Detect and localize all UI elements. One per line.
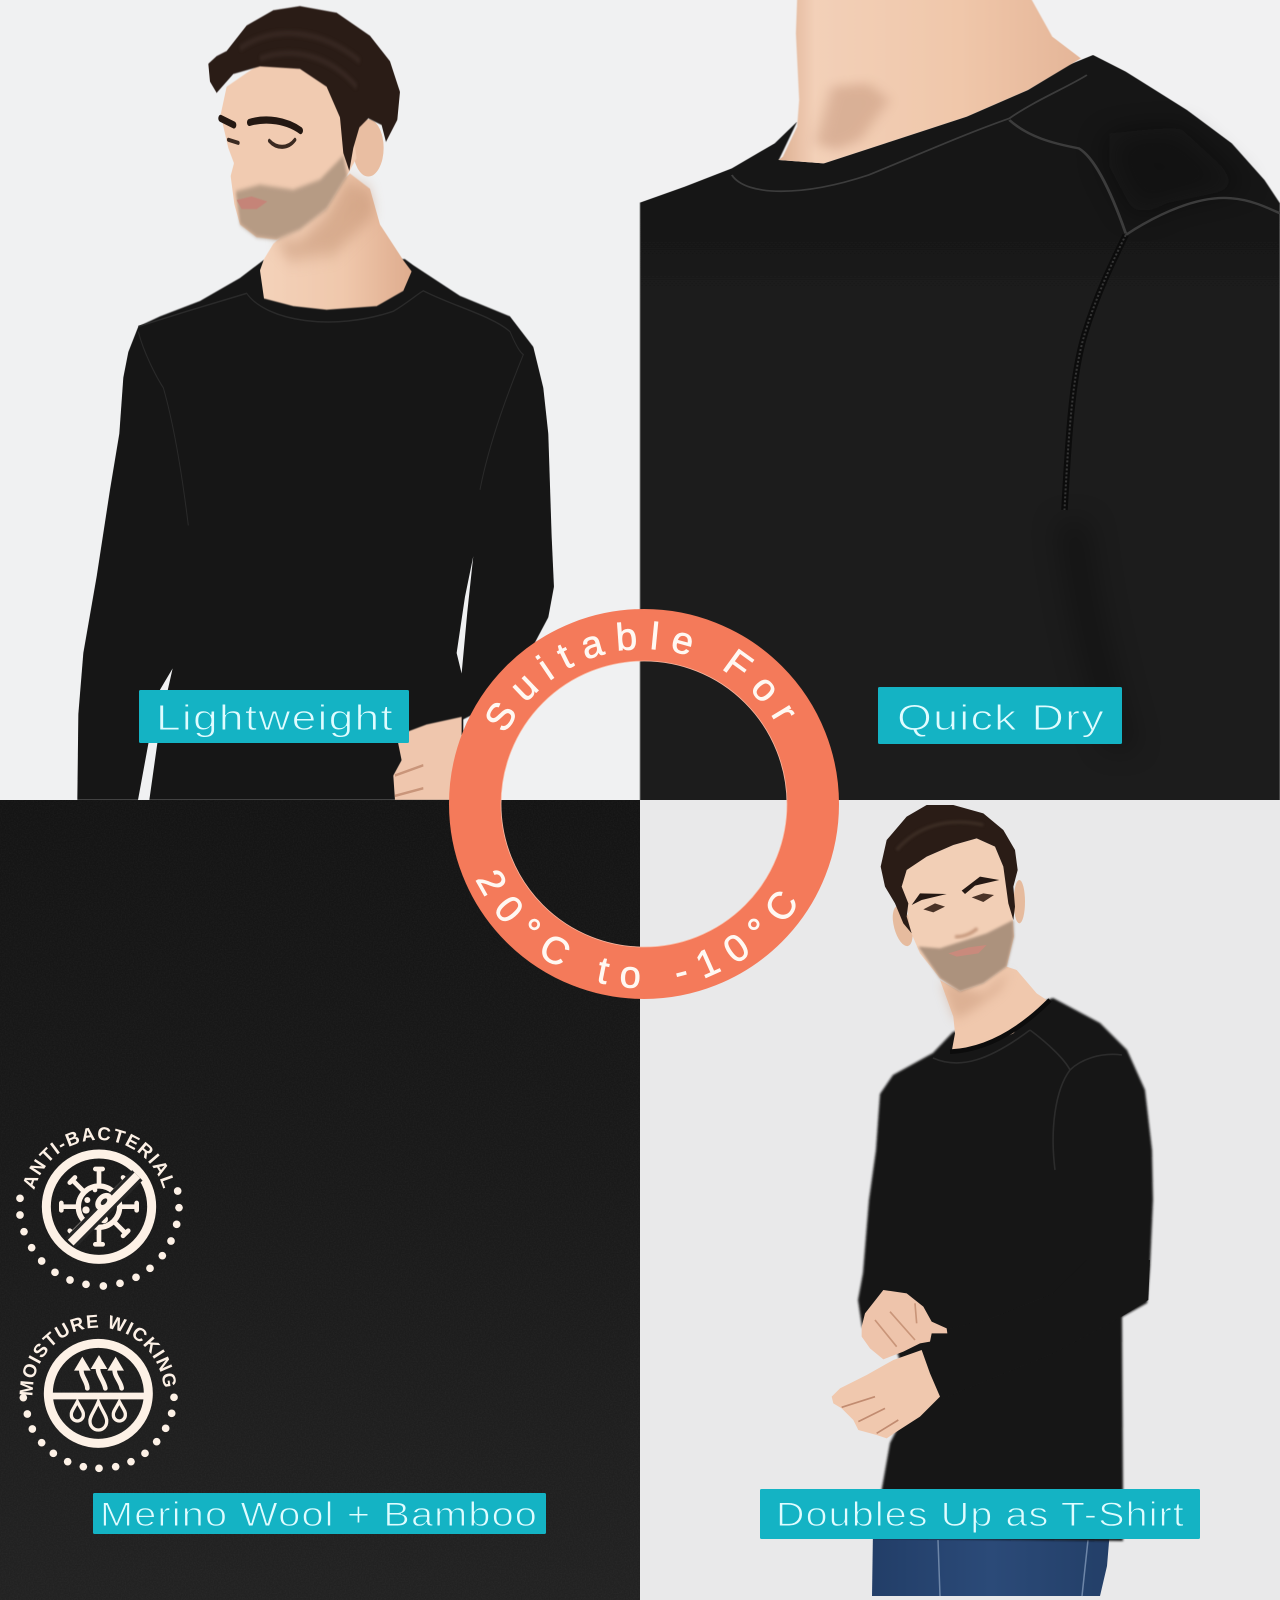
ears xyxy=(889,904,916,948)
badge text: ANTI-BACTERIAL: ANTI-BACTERIAL xyxy=(24,1127,173,1190)
hair highlights xyxy=(240,33,360,87)
icon: dotted arc xyxy=(19,1393,178,1472)
panel: shoulder seam close-up, top right xyxy=(640,0,1280,800)
upper hand pinching cuff xyxy=(862,1290,947,1359)
sleeve fold shadows xyxy=(1073,520,1122,750)
collar and raglan stitching xyxy=(732,75,1280,510)
face xyxy=(902,838,1014,992)
hair xyxy=(881,805,1018,933)
jeans xyxy=(872,1530,1110,1596)
icon: wicking arrows and droplets xyxy=(48,1343,149,1443)
panel: man in side pose, bottom right xyxy=(640,800,1280,1600)
face xyxy=(221,64,357,240)
eyebrows xyxy=(221,118,301,131)
badge: Suitable For 20°C to -10°C ring xyxy=(449,609,839,999)
neck tendon shadow xyxy=(816,83,889,150)
ring text: temperature range: 20°C to -10°C xyxy=(476,870,796,988)
label: Quick Dry: Quick Dry xyxy=(897,697,1105,738)
gap between left sleeve and body xyxy=(138,668,173,800)
neck xyxy=(260,173,412,310)
eyes xyxy=(228,140,295,147)
badge: moisture wicking xyxy=(20,1314,178,1472)
dark yoke patch xyxy=(1109,127,1244,220)
lips xyxy=(948,945,987,957)
neck xyxy=(940,967,1047,1052)
badge text: MOISTURE WICKING: MOISTURE WICKING xyxy=(20,1314,176,1396)
neck shadow xyxy=(942,970,1010,1020)
panel: fabric close-up, bottom left xyxy=(0,800,640,1600)
stubble beard xyxy=(918,920,1014,992)
shirt seams xyxy=(933,1030,1122,1170)
hair highlights xyxy=(897,822,983,850)
forearm sleeve xyxy=(922,1260,1150,1398)
gap between right sleeve and body xyxy=(457,556,473,673)
eyebrows xyxy=(912,893,947,905)
shirt: front view long sleeve xyxy=(77,259,554,800)
lower hand and wrist xyxy=(832,1350,940,1438)
fabric texture xyxy=(0,800,640,1600)
ring text: Suitable For: Suitable For xyxy=(486,621,795,730)
shirt close-up xyxy=(640,55,1280,800)
panel: man looking down, top left xyxy=(0,0,640,800)
label: Lightweight xyxy=(139,690,409,743)
neck shadow xyxy=(273,179,375,260)
shirt seams xyxy=(138,291,523,526)
shirt: side view xyxy=(858,998,1153,1541)
label: Doubles Up as T-Shirt: Doubles Up as T-Shirt xyxy=(776,1496,1185,1534)
icon: crossed-out bacteria xyxy=(46,1154,152,1259)
hand holding hem xyxy=(393,717,462,800)
label: Lightweight: Lightweight xyxy=(156,697,394,738)
label: Doubles Up as T-Shirt xyxy=(760,1489,1200,1539)
eyes xyxy=(923,903,945,912)
ear xyxy=(353,119,384,177)
badge: anti-bacterial xyxy=(16,1127,183,1290)
stubble beard xyxy=(236,156,347,240)
icon: dotted arc xyxy=(16,1187,183,1290)
hair xyxy=(208,6,400,171)
nose shadow xyxy=(955,928,977,937)
label: Merino Wool + Bamboo: Merino Wool + Bamboo xyxy=(100,1496,538,1534)
collar dark band xyxy=(950,1000,1050,1052)
bare neck xyxy=(779,0,1081,163)
label: Quick Dry xyxy=(878,687,1122,744)
lips xyxy=(237,196,267,209)
